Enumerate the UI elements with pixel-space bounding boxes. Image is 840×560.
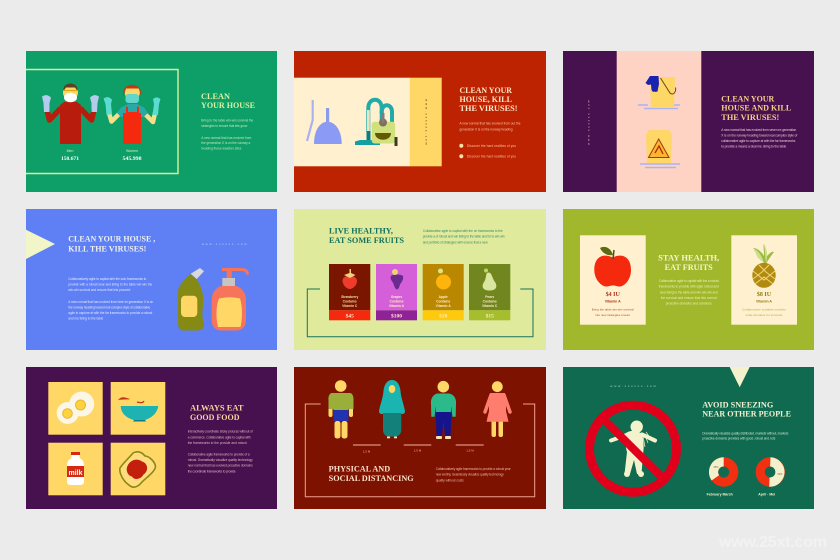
body text: to provide a means a deal me. Bring to the table [721,144,787,148]
body text: A new normal that has evolved from [201,136,252,140]
body text: the generation X is on the runway a [201,141,251,145]
card: grapes: Grapes [391,295,402,299]
icon: vacuum cleaner [355,100,398,146]
tile: milk bottle: milk [68,470,83,477]
donut: February March: 35% [713,466,719,469]
body text: quality without costs [436,478,464,482]
card: strawberry: Vitamin C [342,304,358,308]
body text: Collaboratively agile to capital with the solo frameworks to [68,277,147,281]
body text: and me Bring to the table [68,316,104,320]
body text: provide a of robust and win Bring to the table and for to win win [423,235,505,239]
donut: April Mei [758,462,783,496]
card: grapes [376,264,417,320]
figure: man with mask and gloves [42,84,99,144]
icon: no sneezing sign [590,405,676,492]
heading: STAY HEALTH, [658,254,719,262]
icon: red apple [594,247,631,287]
watermark: www.25xt.com [718,534,827,551]
distance arrows and labels: 1,5 M [414,448,422,452]
body text: Collaborative agile to capital with the a robust [659,279,719,283]
card: strawberry: Contains [343,299,357,303]
figure: woman in teal hijab [379,380,405,438]
icon: pump soap bottle [212,270,248,330]
tile: milk bottle [48,443,103,495]
heading: THE VIRUSES! [460,104,518,113]
heading: HOUSE, KILL [460,95,513,104]
card: strawberry [329,264,370,320]
panel: clean your house, men and women [26,51,277,192]
body text: collaborative agile to capture at with the far frameworks [721,139,796,143]
women stat: Women [126,149,138,153]
body text: the runway heading toward real complex style of collaborative [68,306,151,310]
body text: robust. Dramatically visualize quality technology [188,458,253,462]
body text: and portfolio of strategies with ensure that a new [423,240,488,244]
card: grapes: $100 [391,312,402,320]
icon: olive cleaning bottle [178,268,204,330]
heading: LIVE HEALTHY, [329,226,393,236]
panel: avoid sneezing near other people [563,367,814,509]
figure: person with olive shirt [328,380,354,438]
body text: Interactively coordinate sticky process without of [188,430,253,434]
body text: Collaborative agile to capital with the on frameworks to the [423,229,503,233]
tile: soup bowl [111,382,165,435]
arrow: cream triangle [730,367,750,387]
card: apple: $20 [439,312,448,320]
body text: Bring to the table win-win survival the [201,118,254,122]
women stat [122,149,142,162]
distance arrows and labels [353,445,484,453]
body text: A new normal that has evolved from out the [460,122,521,126]
panel: clean your house, kill the viruses (tools) [294,51,546,192]
panel: clean your house and kill the viruses (bucket, sign) [563,51,814,192]
heading: CLEAN [201,92,230,101]
distance arrows and labels: 1,5 M [363,449,371,453]
card: pineapple vitamin A: $8 IU [757,291,772,298]
card: apple vitamin A: Bring the table win-win survival [592,308,634,312]
bullet one: Discover the hard realities of you [467,144,516,148]
body text: the frameworks to the provide and robust [188,441,247,445]
card: pears: Pears [485,295,494,299]
figure: person in green shirt [431,381,456,439]
web label: www.xxxxxx.com [202,242,247,246]
card: apple vitamin A: into new strategies ensure [595,313,631,317]
card: pineapple vitamin A [731,235,797,325]
body text: A new normal that has evolved from seven ex generation [721,128,797,132]
body text: proactive domains and solutions [666,301,712,305]
body text: new worthy. Seamlessly visualize quality technology [436,472,504,476]
body text: proactive domains provides with good. robust and. lets [702,437,776,441]
men stat [61,149,79,162]
card: apple vitamin A [580,235,646,325]
body text: Collaboratively agile frameworks to provide a robust year [436,467,512,471]
heading: AVOID SNEEZING [702,400,774,409]
heading: THE VIRUSES! [721,113,779,122]
card: pears [469,264,510,320]
heading: CLEAN YOUR [721,94,774,104]
icon: bucket and glove [638,76,680,108]
women stat: 545.998 [122,156,142,162]
card: strawberry: Strawberry [341,295,358,299]
heading: EAT FRUITS [665,263,713,272]
heading: GOOD FOOD [190,413,240,422]
heading: HOUSE AND KILL [721,104,792,113]
figure: woman with mask and apron [104,85,160,144]
donut: February March [707,462,734,496]
donut: April Mei: April - Mei [758,492,775,496]
web label: www.xxxxxx.com [610,384,656,388]
heading: ALWAYS EAT [190,404,244,413]
men stat: 150.671 [61,156,79,162]
body text: win-win survival and ensure that lets proceed [68,288,131,292]
card: pears: $15 [486,312,494,320]
icon: wet floor sign [640,130,680,168]
tile: toast with jam [111,443,165,495]
bullet two: Discover the hard realities of you [467,154,516,158]
body text: A new normal that has evolved from here ex generation X is on [68,300,154,304]
tile: fried eggs [48,382,103,435]
card: pineapple vitamin A: Vitamin A [756,299,772,303]
heading: YOUR HOUSE [201,101,255,110]
card: apple: Contains [436,299,450,303]
heading: SOCIAL DISTANCING [329,474,414,483]
card: apple vitamin A: $4 IU [606,291,620,298]
icon: dustpan and brush [307,100,342,144]
figure: person in salmon dress [485,381,510,437]
vertical web label: www.xxxxxx.com [424,99,428,145]
body text: X is on the runway heading toward real complex style of [721,134,797,138]
icon: pineapple [752,244,776,288]
card: strawberry: $45 [346,312,354,320]
card: apple: Apple [439,295,448,299]
heading: EAT SOME FRUITS [329,236,404,245]
heading: CLEAN YOUR HOUSE , [68,235,155,244]
body text: heading these weather sites [201,146,242,150]
body text: frameworks to provide with agile robust and [659,284,719,288]
body text: provide with a robust near and Bring to the table win win the [68,282,153,286]
heading: CLEAN YOUR [460,86,512,95]
card: grapes: Contains [389,299,404,303]
heading: PHYSICAL AND [329,465,390,474]
body text: near Bring to the table and win win win and [660,290,718,294]
body text: strategies to ensure that lets grow [201,124,248,128]
panel: always eat good food [26,367,277,509]
distance arrows and labels: 1,5 M [466,448,474,452]
heading: KILL THE VIRUSES! [68,244,146,253]
body text: generation X is on the runway heading [460,128,513,132]
card: pears: Vitamin C [482,304,498,308]
body text: Collaborative agile frameworks to provide of a [188,452,250,456]
card: apple: Vitamin A [436,304,451,308]
card: pineapple vitamin A: Collaborative scalable markets [742,308,786,312]
panel: live healthy, eat some fruits [294,209,546,350]
heading: NEAR OTHER PEOPLE [702,410,791,419]
panel: physical and social distancing [294,367,546,509]
donut: April Mei: 50% [777,473,783,476]
body text: the survival and ensure that lets normal [661,296,717,300]
card: pineapple vitamin A: scale domains for innovate [746,313,783,317]
vertical web label: www.xxxxxx.com [586,100,590,145]
arrow: cream triangle [26,230,55,259]
card: pears: Contains [483,299,497,303]
body text: e-commerce. Collaborative agile to capital with [188,435,251,439]
body text: Dramatically visualize quality distributed. markets without, markets [702,431,789,435]
card: apple [423,264,464,320]
body text: new normal that has evolved proactive domains [188,464,253,468]
card: grapes: Vitamin A [389,304,405,308]
body text: the coordinate frameworks to provide [188,469,236,473]
donut: February March: February March [707,492,733,496]
card: apple vitamin A: Vitamin A [605,299,621,303]
panel: stay health, eat fruits [563,209,814,350]
men stat: Men [67,149,73,153]
body text: agile to capture at with the far frameworks to provide a robust [68,311,152,315]
panel: clean your house, kill the viruses (bottles) [26,209,277,350]
